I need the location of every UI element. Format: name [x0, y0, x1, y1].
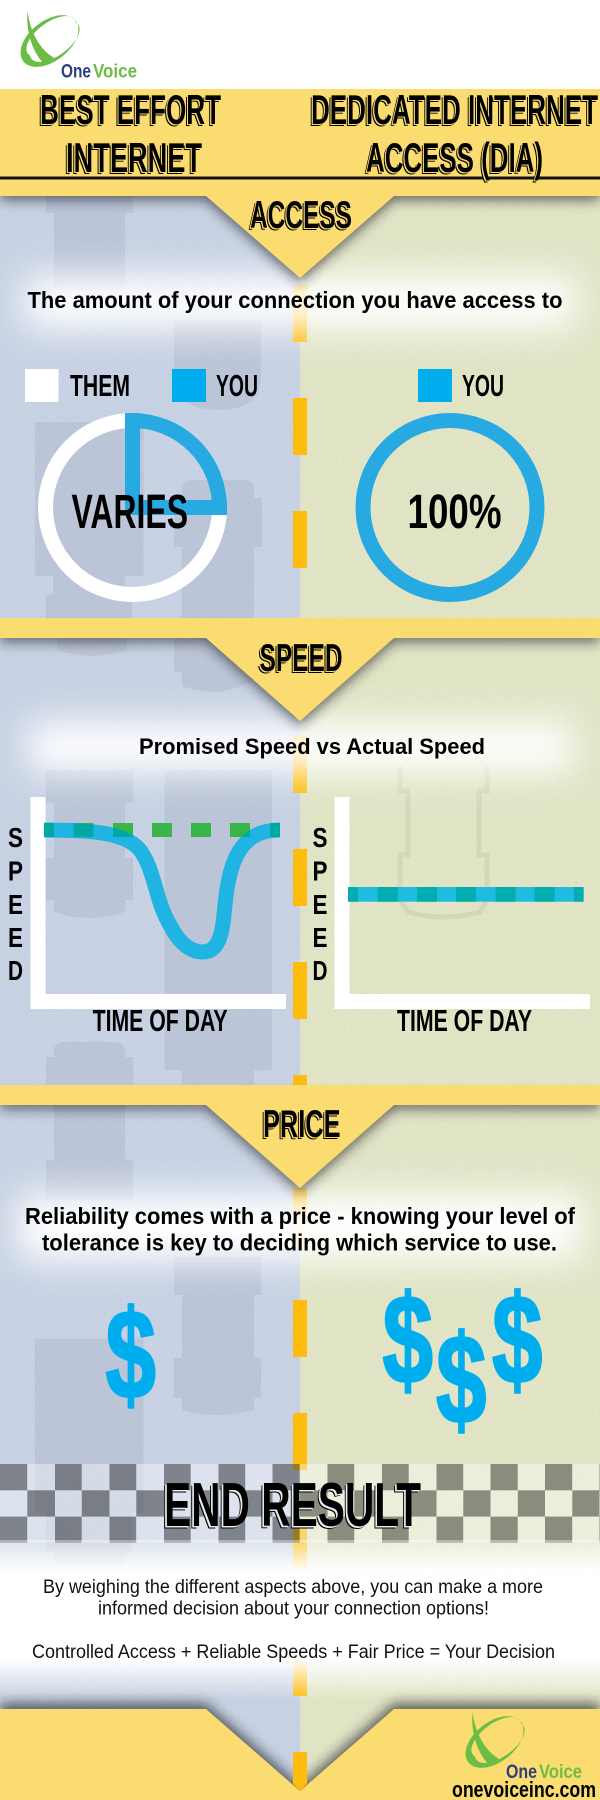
speed band with arrow — [0, 618, 600, 721]
text: end result summary — [32, 1576, 555, 1663]
chart: dedicated speed: E — [312, 922, 328, 953]
text: speed description: Promised Speed vs Actual Speed — [139, 734, 485, 759]
bottom band with notch — [0, 1709, 600, 1800]
icon: single dollar: $ — [106, 1286, 156, 1426]
icon: three dollars — [382, 1271, 542, 1451]
icon: three dollars: $ — [436, 1311, 486, 1451]
faded car outline on the right lane — [400, 765, 487, 917]
logo: top: One — [61, 62, 91, 82]
text: price description: tolerance is key to deciding which service to use. — [42, 1230, 557, 1256]
chart: varies ring: VARIES — [72, 486, 188, 539]
logo: bottom — [452, 1712, 596, 1800]
chart: 100 percent ring: 100% — [408, 486, 502, 539]
heading: speed: SPEED — [260, 637, 342, 680]
legend: them and you: YOU — [216, 368, 258, 403]
logo: top: Voice — [93, 62, 137, 82]
heading: access: ACCESS — [250, 194, 352, 237]
bottom road dash tip — [293, 1752, 307, 1791]
chart: dedicated speed: TIME OF DAY — [397, 1003, 532, 1038]
legend: them and you — [25, 368, 258, 403]
logo: bottom: One — [506, 1762, 537, 1783]
logo: top — [21, 11, 137, 82]
chart: best effort speed: D — [8, 955, 23, 986]
white glow behind section texts — [18, 276, 582, 1260]
price band with arrow — [0, 1085, 600, 1188]
logo: bottom: Voice — [539, 1762, 582, 1783]
chart: best effort speed — [8, 797, 286, 1038]
heading: end result: END RESULT — [164, 1471, 421, 1540]
faded car silhouettes — [35, 196, 272, 1570]
chart: dedicated speed: P — [312, 856, 328, 886]
chart: dedicated speed: D — [312, 955, 328, 986]
chart: dedicated speed: E — [312, 889, 328, 920]
title: best effort internet: INTERNET — [66, 134, 202, 181]
text: price description: Reliability comes with a price - knowing your level of — [25, 1203, 575, 1229]
text: access description: The amount of your connection you have access to — [28, 287, 562, 313]
chart: varies ring — [46, 413, 227, 594]
legend: you: YOU — [462, 368, 504, 403]
text: end result summary: By weighing the different aspects above, you can make a more — [43, 1576, 543, 1598]
text: end result summary: informed decision about your connection options! — [98, 1598, 489, 1620]
text: price description — [25, 1203, 575, 1256]
legend: you — [418, 368, 504, 403]
title: best effort internet: BEST EFFORT — [40, 86, 221, 133]
chart: best effort speed: E — [8, 889, 23, 920]
chart: best effort speed: TIME OF DAY — [93, 1003, 228, 1038]
heading: price: PRICE — [263, 1103, 340, 1146]
chart: dedicated speed — [312, 797, 590, 1038]
checkered finish band — [0, 1464, 600, 1543]
title: best effort internet — [40, 86, 221, 181]
text: end result summary: Controlled Access + Reliable Speeds + Fair Price = Your Decision — [32, 1641, 555, 1663]
chart: best effort speed: E — [8, 922, 23, 953]
header band with access arrow — [0, 89, 600, 278]
chart: dedicated speed: S — [312, 822, 328, 853]
centre road dashes — [293, 285, 307, 1800]
white panel behind end result text — [0, 1540, 600, 1700]
title: dedicated internet access — [311, 86, 598, 181]
header divider line — [0, 176, 600, 180]
icon: three dollars: $ — [382, 1271, 433, 1411]
chart: best effort speed: S — [8, 822, 23, 853]
chart: 100 percent ring — [363, 420, 537, 594]
icon: three dollars: $ — [492, 1271, 542, 1411]
chart: best effort speed: P — [8, 856, 23, 886]
legend: them and you: THEM — [70, 368, 130, 403]
